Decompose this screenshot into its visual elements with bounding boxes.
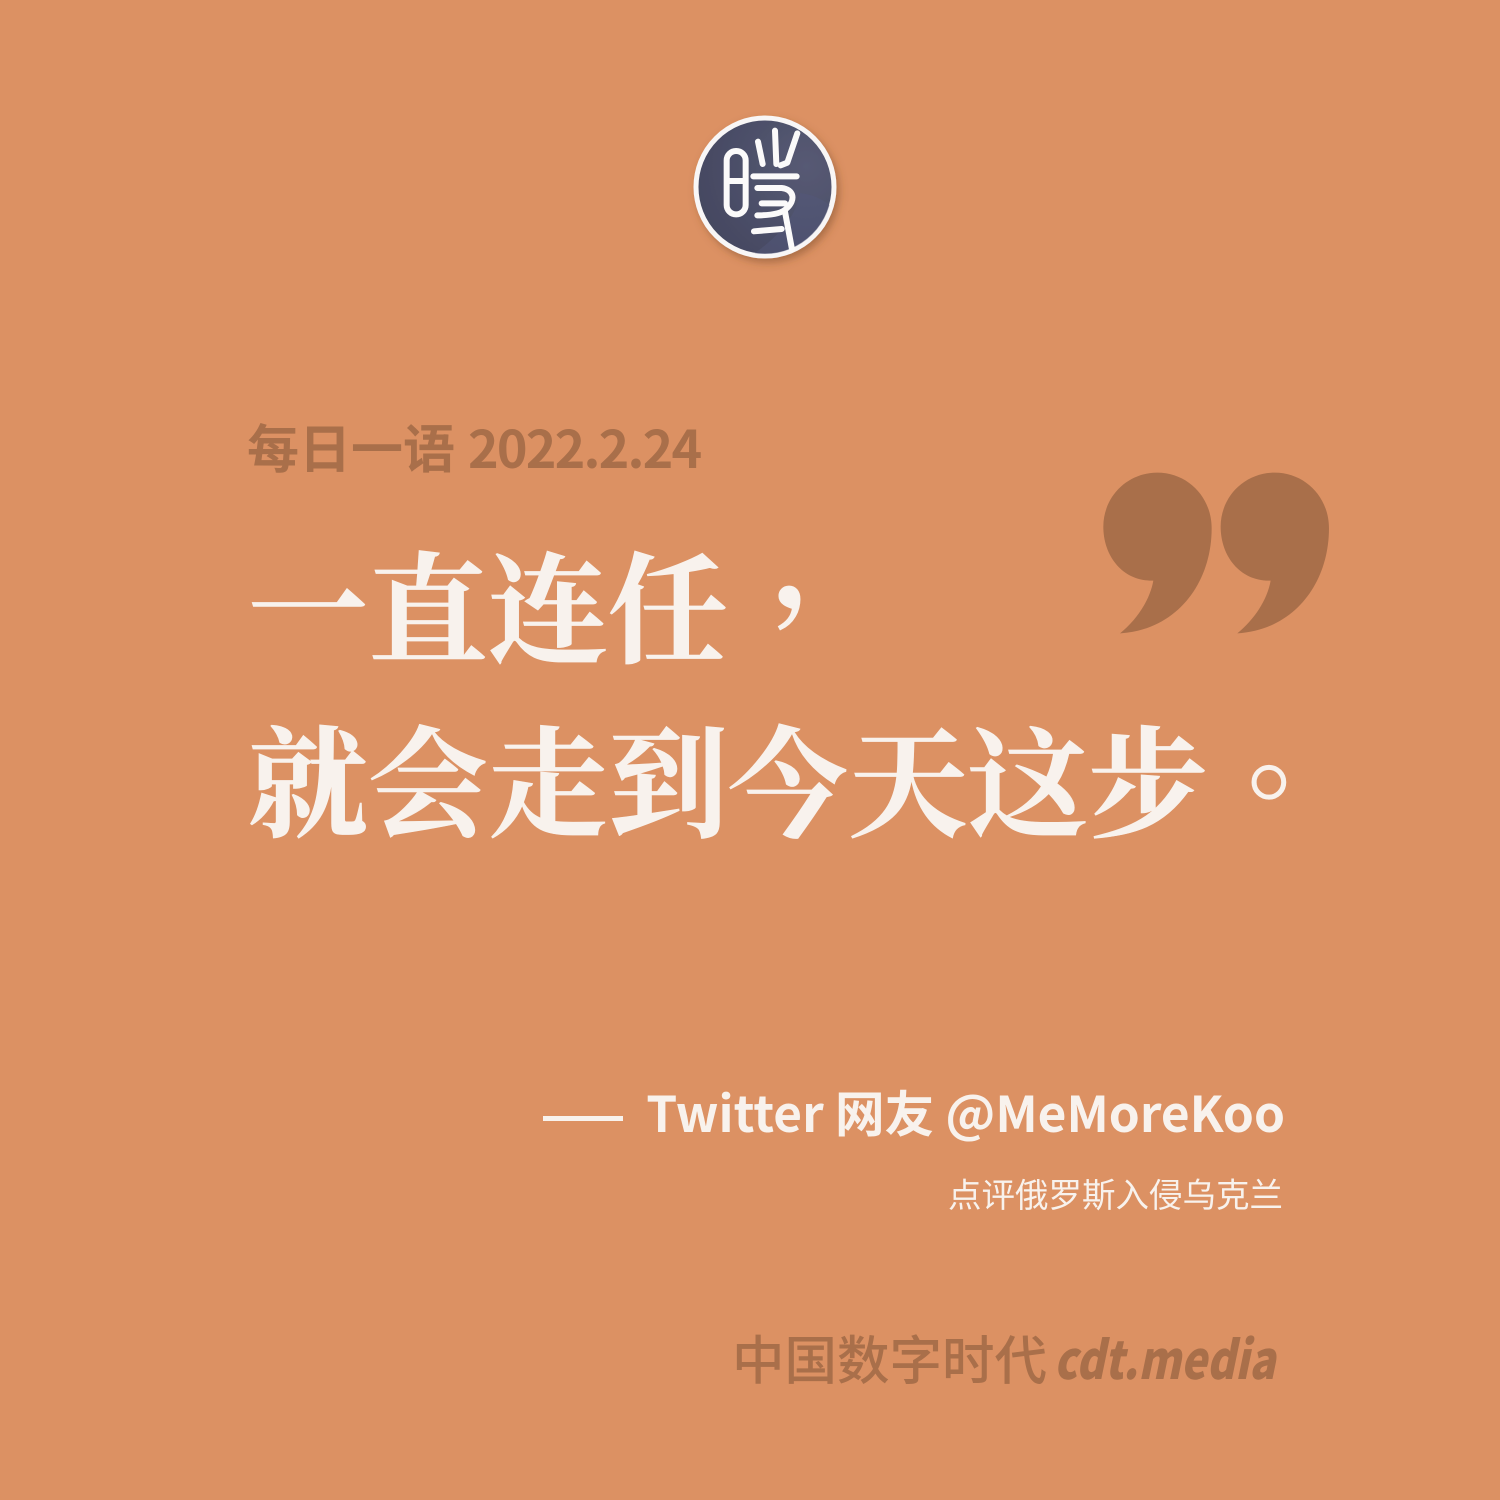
attribution dash — [543, 1116, 623, 1121]
date heading: 2022.2.24 — [468, 408, 700, 483]
quote line two: 就会走到今天这步 。 — [248, 652, 1367, 862]
date heading: 每日一语 — [247, 408, 455, 483]
footer brand — [732, 1319, 1276, 1395]
footer brand: 中国数字时代 — [732, 1319, 1047, 1395]
quote line one: 一直连任 ， — [248, 466, 892, 688]
attribution note: 点评俄罗斯入侵乌克兰 — [948, 1168, 1283, 1217]
attribution name: Twitter 网友 @MeMoreKoo — [646, 1075, 1285, 1147]
footer brand: cdt.media — [1054, 1319, 1275, 1395]
logo badge — [693, 116, 843, 266]
date heading — [247, 408, 701, 483]
